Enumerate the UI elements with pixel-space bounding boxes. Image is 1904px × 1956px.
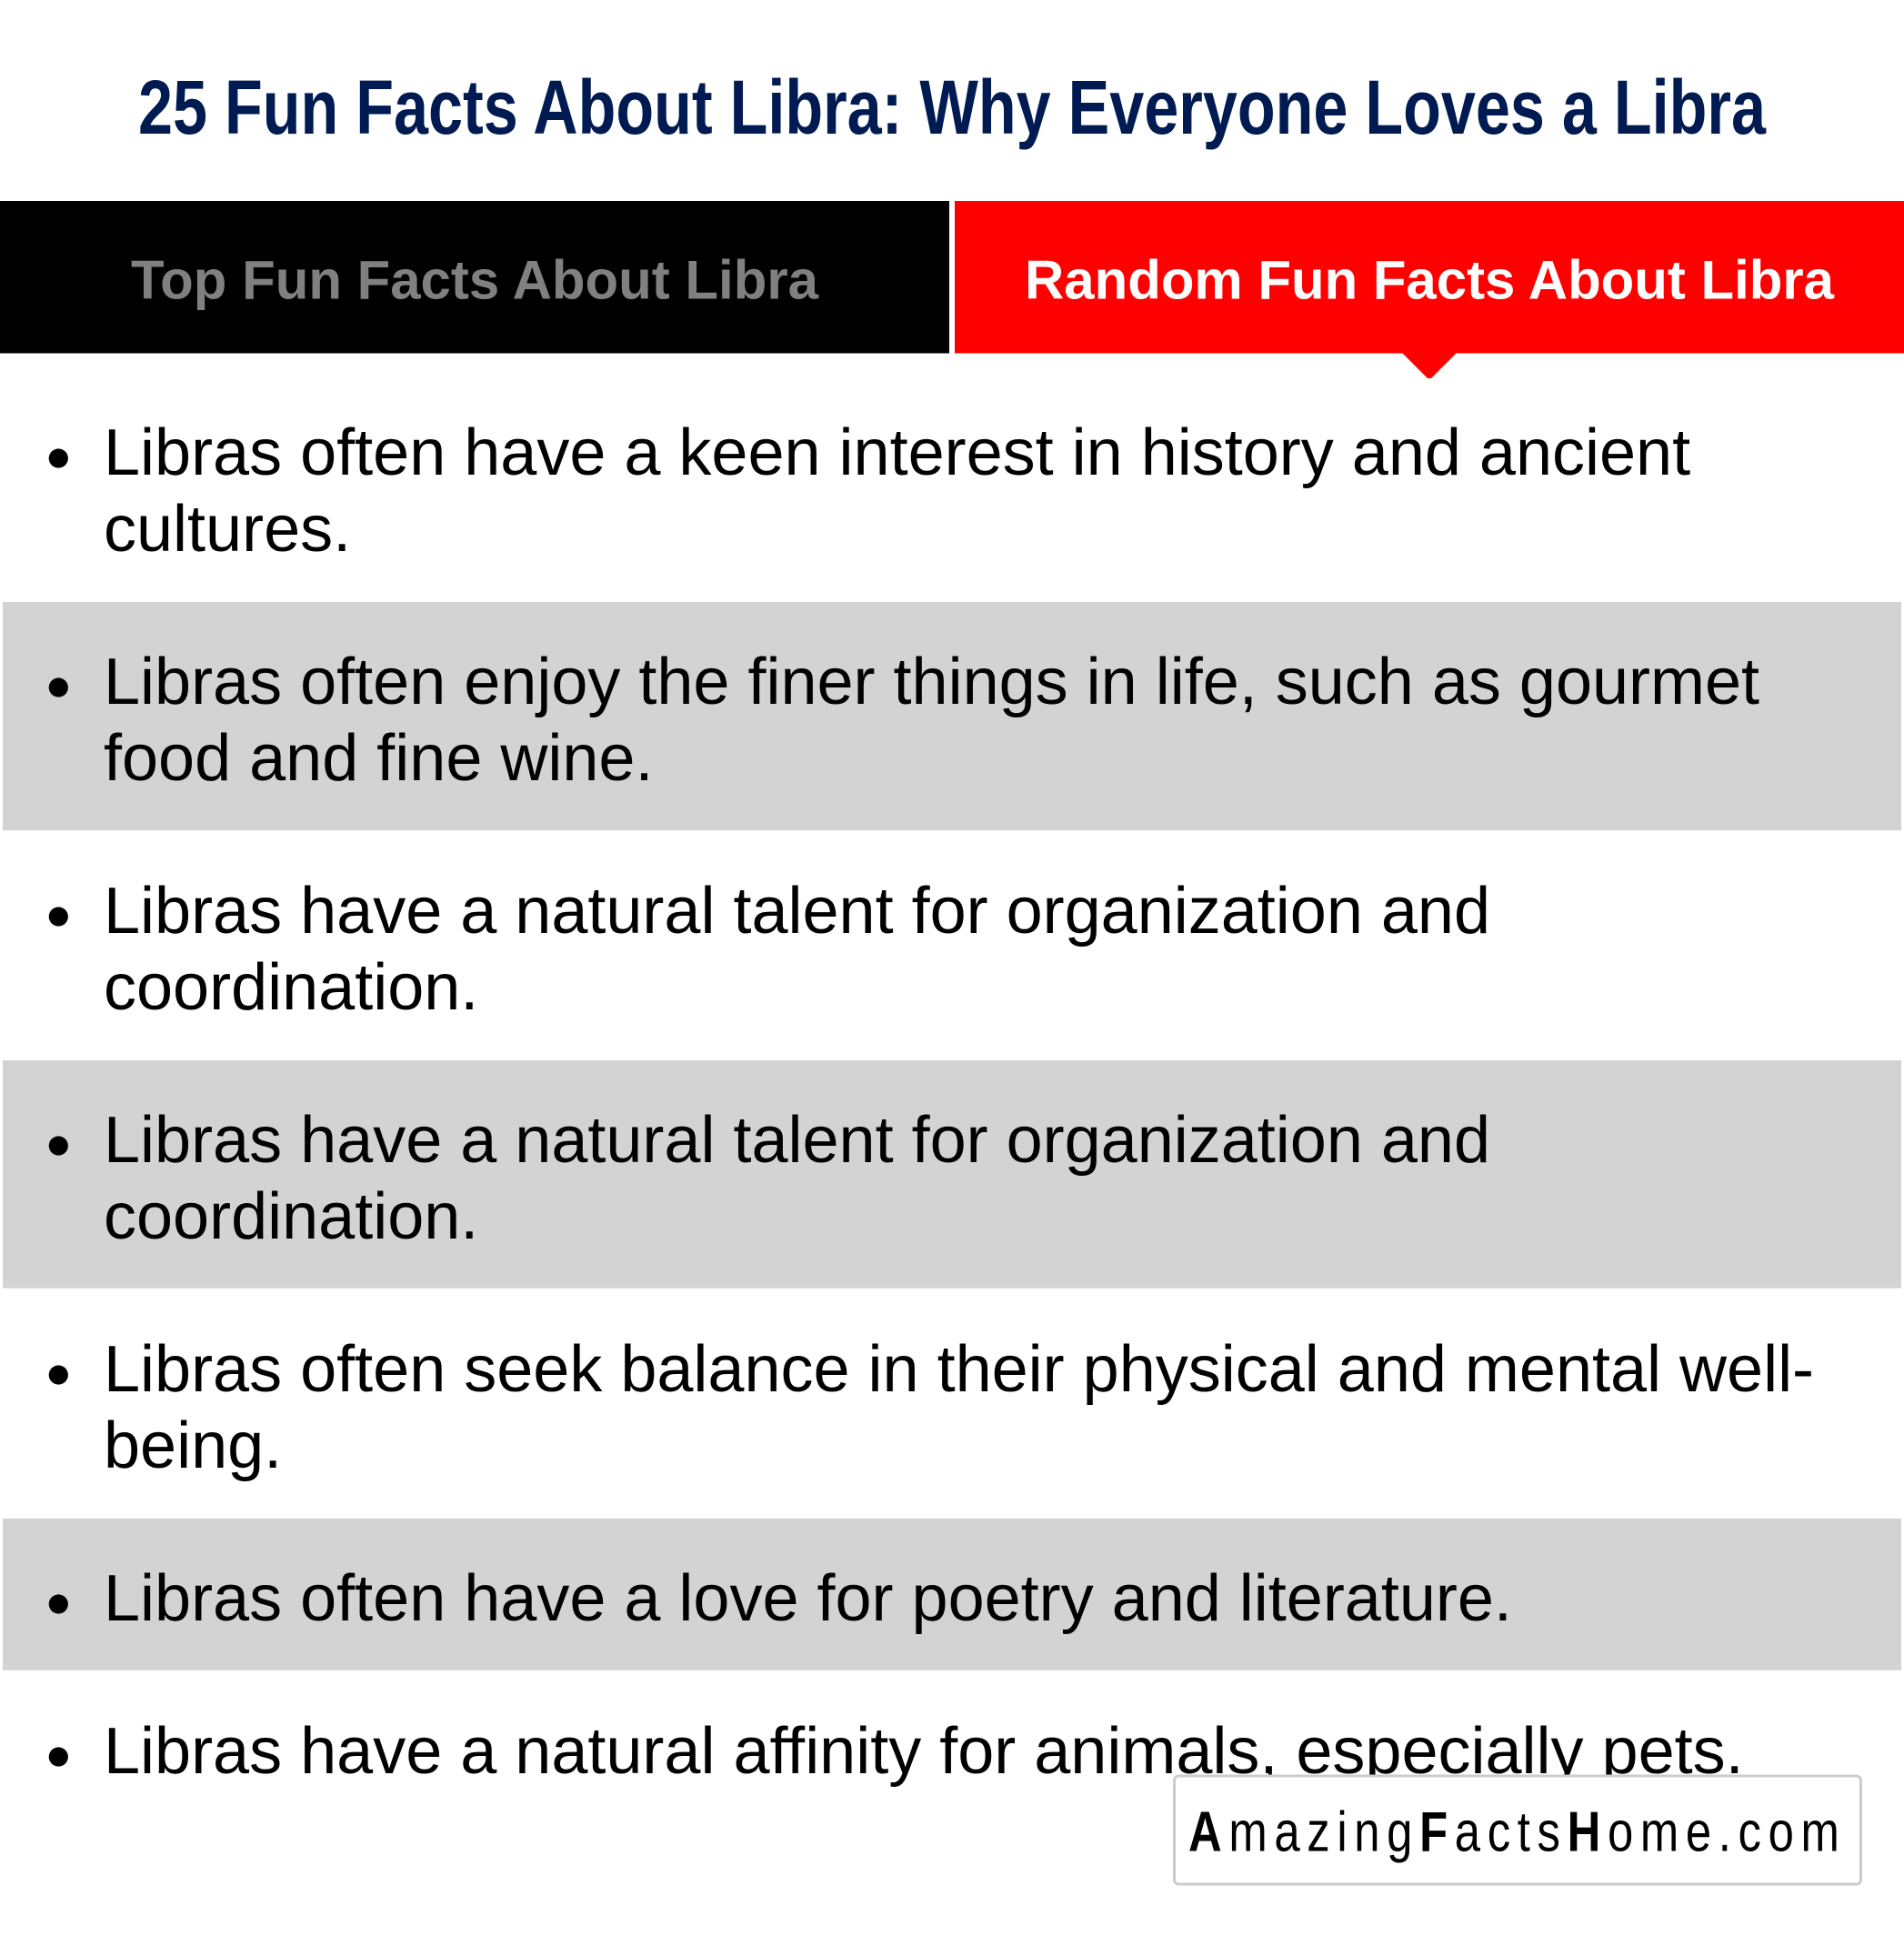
tab: random fun facts (active) xyxy=(955,201,1904,378)
fact list xyxy=(3,416,1901,1788)
fact 5: being. xyxy=(104,1409,282,1482)
fact 2: food and fine wine. xyxy=(104,722,653,795)
fact 3: coordination. xyxy=(104,951,478,1024)
fact 3 xyxy=(49,875,1490,1024)
tab: top fun facts xyxy=(0,201,949,353)
watermark: AmazingFactsHome.com xyxy=(1188,1801,1847,1864)
fact 2 xyxy=(3,602,1901,830)
fact 1: cultures. xyxy=(104,493,351,566)
fact 6: Libras often have a love for poetry and literature. xyxy=(104,1562,1512,1635)
fact 2: Libras often enjoy the finer things in life, such as gourmet xyxy=(104,646,1759,718)
fact 4 xyxy=(3,1060,1901,1289)
fact 3: Libras have a natural talent for organization and xyxy=(104,875,1490,948)
fact 5: Libras often seek balance in their physical and mental well- xyxy=(104,1333,1814,1406)
watermark xyxy=(1175,1776,1860,1884)
tab: top fun facts: Top Fun Facts About Libra xyxy=(131,250,819,311)
fact 4: coordination. xyxy=(104,1180,478,1253)
fact 5 xyxy=(49,1333,1814,1482)
fact 7: Libras have a natural affinity for animals, especially pets. xyxy=(104,1715,1744,1788)
fact 1: Libras often have a keen interest in history and ancient xyxy=(104,416,1690,489)
fact 1 xyxy=(49,416,1690,566)
fact 6 xyxy=(3,1519,1901,1670)
fact 4: Libras have a natural talent for organization and xyxy=(104,1104,1490,1177)
tab: random fun facts (active): Random Fun Facts About Libra xyxy=(1025,250,1835,311)
